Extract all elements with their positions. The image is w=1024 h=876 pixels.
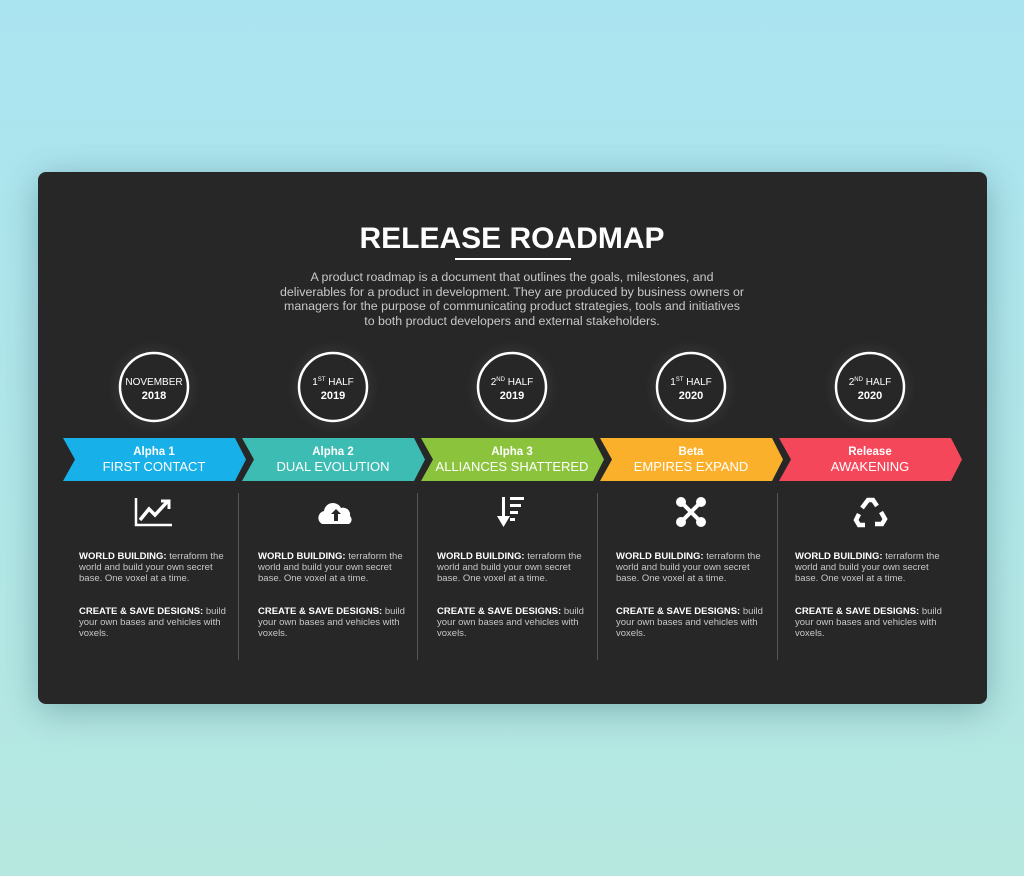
column texts: voxels. — [437, 628, 467, 639]
column texts: world and build your own secret — [436, 562, 571, 573]
column texts: WORLD BUILDING: terraform the — [437, 551, 582, 562]
date circles: 2 — [849, 377, 854, 388]
column texts: CREATE & SAVE DESIGNS: build — [795, 606, 942, 617]
date circles: 2 — [491, 377, 496, 388]
chevron timeline: EMPIRES EXPAND — [634, 459, 748, 474]
icon: joomla — [678, 499, 704, 525]
chevron timeline: Release — [848, 446, 892, 458]
column texts: WORLD BUILDING: terraform the — [616, 551, 761, 562]
column texts: world and build your own secret — [78, 562, 213, 573]
chevron timeline: DUAL EVOLUTION — [277, 459, 389, 474]
column texts: WORLD BUILDING: terraform the — [795, 551, 940, 562]
date circles: ST — [676, 377, 684, 383]
column texts: your own bases and vehicles with — [795, 617, 937, 628]
chevron timeline: Alpha 1 — [133, 446, 175, 458]
date circles: 2020 — [858, 390, 882, 402]
date circles: HALF — [863, 377, 891, 388]
intro paragraph: A product roadmap is a document that outlines the goals, milestones, and — [311, 270, 714, 284]
date circles: 1 — [312, 377, 318, 388]
chevron timeline — [63, 438, 962, 481]
column texts: voxels. — [258, 628, 288, 639]
chevron timeline: FIRST CONTACT — [103, 459, 205, 474]
date circles: 2019 — [321, 390, 345, 402]
column texts: base. One voxel at a time. — [79, 573, 189, 584]
column texts: base. One voxel at a time. — [258, 573, 368, 584]
chevron timeline: Alpha 2 — [312, 446, 354, 458]
intro paragraph — [280, 270, 744, 328]
column texts — [78, 551, 942, 639]
date circles: HALF — [683, 377, 712, 388]
panel: roadmap card — [38, 172, 987, 704]
column texts: WORLD BUILDING: terraform the — [258, 551, 403, 562]
date circles: 2019 — [500, 390, 524, 402]
date circles: ND — [496, 377, 506, 383]
column texts: CREATE & SAVE DESIGNS: build — [258, 606, 405, 617]
column texts: voxels. — [79, 628, 109, 639]
title: RELEASE ROADMAP — [359, 222, 665, 255]
column texts: CREATE & SAVE DESIGNS: build — [79, 606, 226, 617]
column texts: base. One voxel at a time. — [437, 573, 547, 584]
date circles: 2018 — [142, 390, 166, 402]
date circles — [108, 341, 916, 433]
column texts: WORLD BUILDING: terraform the — [79, 551, 224, 562]
column texts: CREATE & SAVE DESIGNS: build — [616, 606, 763, 617]
column texts: your own bases and vehicles with — [616, 617, 758, 628]
chevron timeline: AWAKENING — [831, 459, 909, 474]
date circles: NOVEMBER — [125, 377, 183, 388]
column texts: world and build your own secret — [794, 562, 929, 573]
date circles: HALF — [325, 377, 354, 388]
column texts: your own bases and vehicles with — [258, 617, 400, 628]
intro paragraph: deliverables for a product in development. They are produced by business owners or — [280, 285, 744, 299]
intro paragraph: to both product developers and external stakeholders. — [364, 314, 660, 328]
column texts: world and build your own secret — [257, 562, 392, 573]
date circles: ND — [854, 377, 864, 383]
column texts: voxels. — [616, 628, 646, 639]
date circles: 2020 — [679, 390, 703, 402]
icon: cloud upload — [318, 503, 352, 524]
column texts: CREATE & SAVE DESIGNS: build — [437, 606, 584, 617]
column texts: base. One voxel at a time. — [616, 573, 726, 584]
date circles: 1 — [670, 377, 676, 388]
icon: recycle — [856, 500, 885, 525]
column texts: your own bases and vehicles with — [79, 617, 221, 628]
column texts: voxels. — [795, 628, 825, 639]
chevron timeline: ALLIANCES SHATTERED — [436, 459, 588, 474]
icon: chart — [136, 498, 172, 525]
chevron timeline: Alpha 3 — [491, 446, 533, 458]
column texts: your own bases and vehicles with — [437, 617, 579, 628]
date circles: HALF — [505, 377, 533, 388]
column texts: world and build your own secret — [615, 562, 750, 573]
date circles: ST — [318, 377, 326, 383]
chevron timeline: Beta — [679, 446, 704, 458]
column texts: base. One voxel at a time. — [795, 573, 905, 584]
intro paragraph: managers for the purpose of communicating product strategies, tools and initiatives — [284, 299, 740, 313]
icon: sort — [497, 497, 524, 527]
